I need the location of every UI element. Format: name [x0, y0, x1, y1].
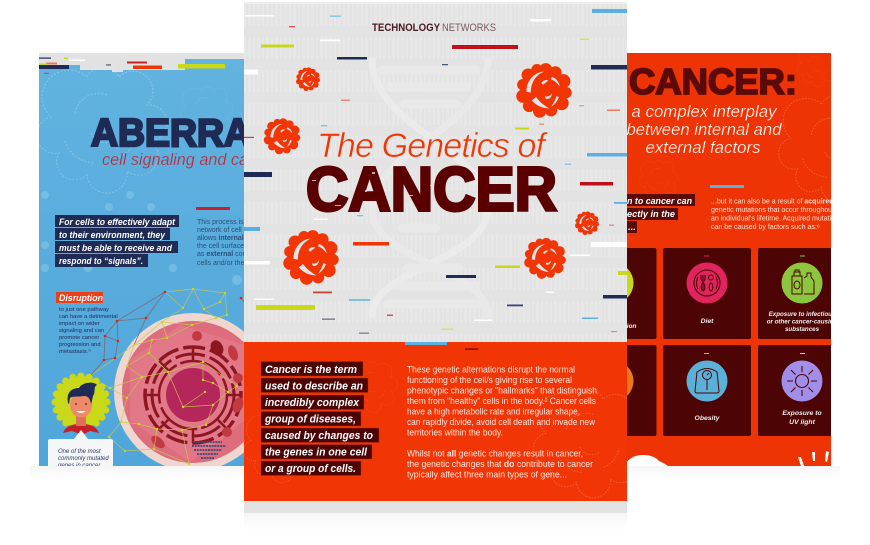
drop shadows under pages: [30, 466, 840, 533]
disruption text: signaling and can: [59, 328, 104, 334]
background cell outlines: [37, 67, 233, 193]
bottom decoration: cloud and rays: [627, 451, 829, 466]
process text: network of cell: [197, 227, 242, 234]
icon: plate and cutlery: [694, 270, 720, 296]
background outlines: [243, 362, 644, 498]
highlighted statement: incredibly complex: [265, 397, 360, 409]
highlighted text: ectly in the: [627, 209, 676, 220]
card: exposure to substances: substances: [785, 326, 820, 333]
process text: [197, 219, 246, 267]
top glitch band: [39, 53, 244, 74]
highlighted text: n to cancer can: [627, 196, 692, 207]
subtitle: external factors: [646, 139, 760, 157]
title: CANCER: CANCER: [306, 156, 557, 224]
callout: commonly mutated: [58, 456, 109, 462]
subtitle: [627, 105, 782, 153]
highlighted statement: caused by changes to: [265, 430, 373, 442]
panel: red text section: [243, 342, 644, 501]
highlighted text: ...: [628, 222, 636, 233]
acquired mutations text: [711, 198, 843, 231]
body text: territories within the body.: [407, 428, 503, 438]
highlighted intro text: For cells to effectively adapt: [59, 217, 176, 228]
heading: ABERRANT: ABERRA: [91, 112, 251, 155]
body text: These genetic alternations disrupt the normal: [407, 364, 575, 374]
card: diet: [663, 248, 751, 339]
red accent bar: [196, 207, 230, 210]
highlighted intro text: must be able to receive and: [59, 243, 172, 254]
highlighted statement: used to describe an: [265, 380, 363, 392]
body text: can rapidly divide, avoid cell death and invade new: [407, 417, 595, 427]
icon: scale: [695, 368, 719, 393]
blue accent bar: [710, 185, 744, 188]
disruption text: progression and: [59, 342, 101, 348]
highlighted statement: [261, 362, 379, 476]
card: obesity: Obesity: [695, 415, 721, 422]
disruption text: [59, 307, 118, 355]
body text: typically affect three main types of gene...: [407, 470, 567, 480]
subtitle: cell signaling and ca: [102, 151, 248, 169]
acquired mutations text: genetic mutations that occur throughout: [711, 207, 834, 214]
body text: functioning of the cell/s giving rise to several: [407, 375, 572, 385]
card: exposure to substances: or other cancer-causing: [767, 318, 837, 326]
body text: have a high metabolic rate and irregular shape,: [407, 406, 580, 416]
DNA helix background: [372, 60, 488, 315]
card: lifestyle: [627, 345, 656, 436]
acquired mutations text: an individual’s lifetime. Acquired mutations: [711, 216, 843, 222]
icon: bottles: [792, 270, 814, 294]
highlighted statement: or a group of cells.: [265, 463, 356, 475]
highlighted intro text: respond to “signals”.: [59, 256, 143, 267]
card: radiation: [627, 248, 656, 339]
card: UV light: UV light: [789, 419, 816, 426]
highlighted statement: the genes in one cell: [265, 446, 368, 458]
card: exposure to substances: Exposure to infectious: [769, 311, 836, 318]
logo second word: NETWORKS: [442, 22, 496, 34]
disruption label: Disruption: [59, 293, 103, 303]
callout: [48, 430, 113, 470]
avatar: scientist: [55, 376, 107, 435]
card: diet: Diet: [701, 318, 714, 325]
background outlines: [638, 53, 831, 202]
body text: Whilst not all genetic changes result in cancer,: [407, 448, 583, 458]
highlighted statement: group of diseases,: [264, 414, 356, 426]
acquired mutations text: can be caused by factors such as:⁶: [711, 224, 820, 231]
subtitle: between internal and: [626, 121, 782, 139]
scattered glitch bars: [244, 9, 627, 334]
body text: [407, 364, 597, 480]
disruption text: to just one pathway: [59, 307, 109, 313]
title: The Genetics of: The Genetics of: [317, 127, 549, 165]
body text: phenotypic changes or "hallmarks" that distinguish: [407, 386, 597, 396]
logo: Technology Networks: TECHNOLOGY: [372, 22, 441, 34]
network overlay: [89, 288, 244, 465]
body text: them from "healthy" cells in the body.¹ Cancer cells: [407, 396, 596, 406]
card: UV light: Exposure to: [782, 410, 822, 417]
body text: the genetic changes that do contribute to cancer: [407, 459, 593, 469]
process text: the cell surface: [197, 243, 244, 250]
disruption text: impact on wider: [59, 321, 100, 327]
card: exposure to substances: [758, 248, 831, 339]
highlighted intro text: [55, 215, 179, 267]
card: UV light: [758, 345, 831, 436]
panel: right page cancer interplay: [627, 53, 831, 466]
card: radiation: ation: [621, 323, 637, 330]
process text: cells and/or the: [197, 260, 245, 267]
cancer cell icons: [264, 63, 599, 285]
icon: sun: [787, 366, 817, 396]
process text: allows internal: [197, 235, 244, 242]
panel: left page aberrant cell signaling: [39, 53, 244, 466]
illustration: cell: [114, 313, 244, 466]
process text: as external cor: [197, 251, 246, 258]
process text: This process is: [197, 219, 244, 226]
highlighted text: [627, 194, 695, 233]
subtitle: a complex interplay: [632, 103, 778, 121]
callout: One of the most: [58, 449, 101, 455]
card: obesity: [663, 345, 751, 436]
disruption text: can have a detrimental: [59, 314, 118, 320]
callout: genes in cancer: [58, 463, 101, 469]
heading: CANCER:: CANCER:: [629, 61, 797, 102]
panel: center page the genetics of cancer: [243, 2, 644, 513]
disruption text: promote cancer: [59, 335, 99, 341]
highlighted intro text: to their environment, they: [59, 230, 166, 241]
acquired mutations text: ...but it can also be a result of acquired: [711, 198, 834, 206]
disruption text: metastasis.⁵: [59, 348, 91, 355]
highlighted statement: Cancer is the term: [265, 364, 357, 376]
background network dots: [41, 191, 242, 285]
